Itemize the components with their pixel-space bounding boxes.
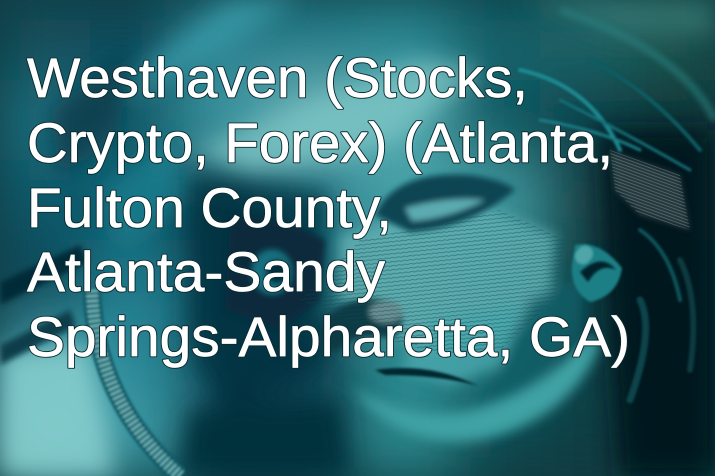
dark band left of portrait (0, 245, 88, 365)
title: Atlanta-Sandy (27, 240, 385, 303)
mouth (375, 368, 478, 386)
title: Crypto, Forex) (Atlanta, (27, 111, 613, 174)
title: Crypto, Forex) (Atlanta, (27, 111, 613, 174)
blurred diagonal bands, top (50, 0, 715, 250)
title: Fulton County, (27, 176, 392, 239)
collar swoop (350, 335, 600, 441)
dark shadows around the portrait (180, 130, 715, 476)
face lights (340, 205, 585, 430)
title: Fulton County, (27, 176, 392, 239)
title: Atlanta-Sandy (27, 240, 385, 303)
title: Westhaven (Stocks, (27, 46, 528, 109)
left eye (225, 215, 325, 330)
coin border arc with milled edge (92, 290, 180, 476)
title (27, 46, 630, 368)
nose (318, 299, 403, 351)
title: Springs-Alpharetta, GA) (27, 305, 630, 368)
engraved skin texture (300, 210, 565, 355)
hair highlight: engraved grey patch (610, 150, 690, 230)
coin border arc, top right (560, 10, 715, 120)
title: Westhaven (Stocks, (27, 46, 528, 109)
pale left bottom of the note (0, 345, 115, 476)
right eye (375, 174, 515, 232)
ear (572, 244, 622, 302)
hair strands (520, 60, 700, 400)
title: Springs-Alpharetta, GA) (27, 305, 630, 368)
